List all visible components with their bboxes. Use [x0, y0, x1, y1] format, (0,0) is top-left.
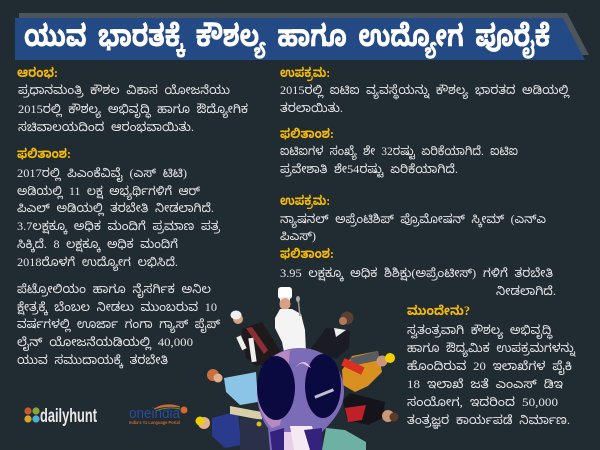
figure: businesswoman — [311, 312, 354, 359]
text block: initiative 2: ಪಿಎಸ್) — [280, 229, 316, 243]
logo: oneindia: India's #1 Language Portal — [129, 420, 180, 425]
text block: result 1 — [17, 146, 220, 271]
figure: engineer — [341, 351, 395, 392]
figure: bottom nurse — [322, 428, 366, 450]
text block: initiative 2: ಉಪಕ್ರಮ: — [280, 193, 330, 210]
figure: man in suit — [343, 393, 398, 425]
text block: what next: ಸಂಯೋಗ, ಇದರಿಂದ 50,000 — [407, 395, 558, 409]
text block: start — [17, 65, 248, 134]
text block: petroleum: ಯುವ ಸಮುದಾಯಕ್ಕೆ ತರಬೇತಿ — [17, 353, 168, 369]
text block: what next: ಸ್ವತಂತ್ರವಾಗಿ ಕೌಶಲ್ಯ ಅಭಿವೃದ್ಧಿ — [407, 323, 553, 340]
text block: petroleum: ವರ್ಷಗಳಲ್ಲಿ ಊರ್ಜಾ ಗಂಗಾ ಗ್ಯಾಸ್ ಪೈಪ್ — [17, 317, 221, 333]
figure: nurse — [207, 369, 258, 405]
text block: what next: ತಂತ್ರಜ್ಞರ ಕಾರ್ಯಪಡೆ ನಿರ್ಮಾಣ. — [407, 413, 570, 430]
text block: start: 2015ರಲ್ಲಿ ಕೌಶಲ್ಯ ಅಭಿವೃದ್ಧಿ ಹಾಗೂ ಔದ್ಯೋಗಿಕ — [18, 102, 248, 119]
text block: what next: ಹಾಗೂ ಔದ್ಯಮಿಕ ಉಪಕ್ರಮಗಳನ್ನು — [407, 341, 576, 357]
text block: petroleum: ಲೈನ್ ಯೋಜನೆಯಡಿಯಲ್ಲಿ 40,000 — [17, 335, 193, 351]
text block: result 3 — [280, 246, 556, 298]
text block: start: ಸಚಿವಾಲಯದಿಂದ ಆರಂಭವಾಯಿತು. — [18, 120, 194, 134]
logo: dailyhunt — [24, 406, 97, 427]
text block: result 3: 3.95 ಲಕ್ಷಕ್ಕೂ ಅಧಿಕ ಶಿಶಿಕ್ಷು(ಅಪ್ರೆಂಟೀಸ್) ಗಳಿಗೆ ತರಬೇತಿ — [280, 266, 553, 282]
text block: start: ಪ್ರಧಾನಮಂತ್ರಿ ಕೌಶಲ ವಿಕಾಸ ಯೋಜನೆಯು — [18, 83, 230, 98]
logo: dailyhunt: dailyhunt — [40, 406, 97, 427]
text block: result 2: ಐಟಿಐಗಳ ಸಂಖ್ಯೆ ಶೇ 32ರಷ್ಟು ಏರಿಕೆಯಾಗಿದೆ. ಐಟಿಐ — [280, 144, 518, 160]
text block: start: ಆರಂಭ: — [17, 65, 58, 80]
text block: result 3: ಫಲಿತಾಂಶ: — [280, 246, 334, 261]
text block: what next: ಮುಂದೇನು? — [407, 303, 470, 318]
text block: petroleum: ಪೆಟ್ರೋಲಿಯಂ ಹಾಗೂ ನೈಸರ್ಗಿಕ ಅನಿಲ — [17, 282, 211, 298]
text block: initiative 1: 2015ರಲ್ಲಿ ಐಟಿಐ ವ್ಯವಸ್ಥೆಯನ್ನು ಕೌಶಲ್ಯ ಭಾರತದ ಅಡಿಯಲ್ಲಿ — [280, 83, 570, 100]
text block: initiative 2 — [280, 193, 546, 243]
text block: result 1: ಅಡಿಯಲ್ಲಿ 11 ಲಕ್ಷ ಅಭ್ಯರ್ಥಿಗಳಿಗೆ ಆರ್ — [17, 184, 200, 200]
text block: result 1: 2018ರೊಳಗೆ ಉದ್ಯೋಗ ಲಭಿಸಿದೆ. — [17, 255, 178, 271]
figure: businessman — [230, 310, 281, 366]
text block: initiative 1: ತರಲಾಯಿತು. — [280, 101, 343, 115]
text block: result 2: ಫಲಿತಾಂಶ: — [280, 126, 334, 141]
text block: initiative 1 — [280, 65, 570, 115]
text block: result 1: 2017ರಲ್ಲಿ ಪಿಎಂಕೆವಿವೈ (ಎಸ್ ಟಿಟಿ) — [17, 166, 187, 182]
text block: what next — [407, 303, 576, 430]
text block: result 1: ಫಲಿತಾಂಶ: — [17, 146, 71, 161]
text block: result 1: ಸಿಕ್ಕಿದೆ. 8 ಲಕ್ಷಕ್ಕೂ ಅಧಿಕ ಮಂದಿಗೆ — [17, 237, 178, 253]
text block: result 1: 3.7ಲಕ್ಷಕ್ಕೂ ಅಧಿಕ ಮಂದಿಗೆ ಪ್ರಮಾಣ ಪತ್ರ — [17, 219, 220, 235]
text block: petroleum: ಕ್ಷೇತ್ರಕ್ಕೆ ಬೆಂಬಲ ನೀಡಲು ಮುಂಬರುವ 10 — [17, 300, 217, 316]
illustration: professionals around globe — [196, 287, 398, 450]
figure: chef — [275, 287, 306, 352]
text block: result 1: ಪಿಎಲ್ ಅಡಿಯಲ್ಲಿ ತರಬೇತಿ ನೀಡಲಾಗಿದೆ. — [17, 201, 214, 217]
text block: result 2 — [280, 126, 518, 178]
text block: what next: 18 ಇಲಾಖೆ ಜತೆ ಎಂಎಸ್ ಡಿಇ — [407, 377, 563, 391]
text block: petroleum — [17, 282, 221, 369]
text block: initiative 2: ನ್ಯಾಷನಲ್ ಅಪ್ರೆಂಟಿಶಿಪ್ ಪ್ರೊಮೋಷನ್ ಸ್ಕೀಮ್ (ಎನ್ಎ — [280, 212, 546, 228]
logo: oneindia: oneindia — [129, 405, 181, 422]
text block: initiative 1: ಉಪಕ್ರಮ: — [280, 65, 330, 82]
title banner — [15, 13, 589, 60]
text block: result 2: ಪ್ರವೇಶಾತಿ ಶೇ54ರಷ್ಟು ಏರಿಕೆಯಾಗಿದೆ. — [280, 162, 458, 178]
figure: worker with plans — [196, 406, 275, 450]
icon: purple globe — [257, 348, 344, 450]
text block: result 3: ನೀಡಲಾಗಿದೆ. — [496, 284, 556, 298]
text block: what next: ಹೊಂದಿರುವ 20 ಇಲಾಖೆಗಳ ಪೈಕಿ — [407, 359, 572, 375]
